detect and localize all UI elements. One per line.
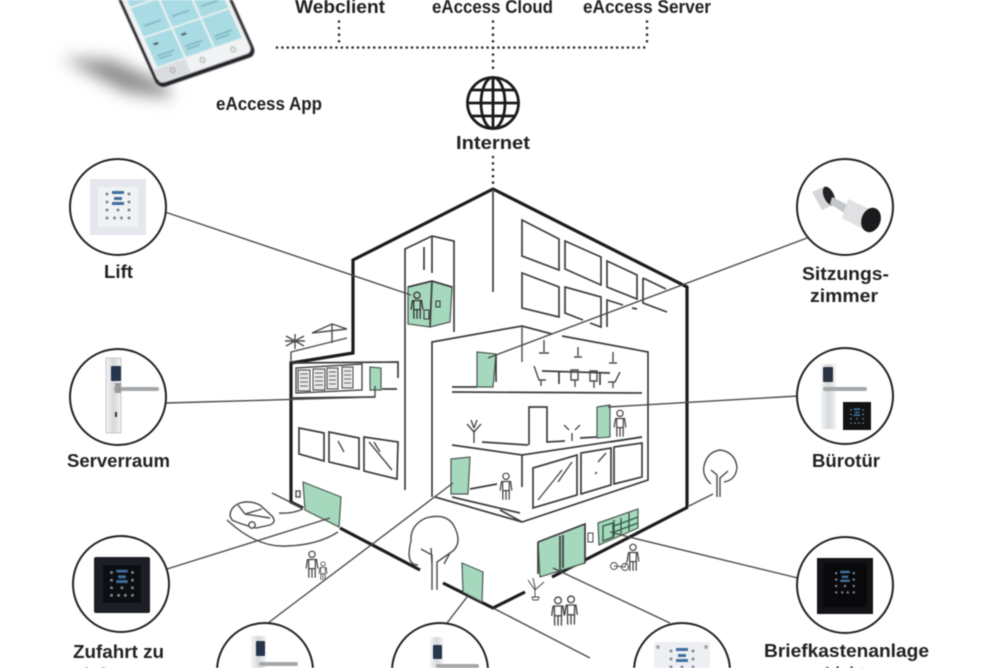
callout: bottom door handle left	[217, 623, 313, 668]
middle entrance door	[451, 457, 512, 500]
label: Lift: Lift	[104, 262, 133, 282]
label: Briefkastenanlage: Briefkastenanlage	[764, 641, 929, 661]
upper facade windows	[493, 189, 667, 327]
building illustration	[227, 189, 737, 626]
callout: Bürotür	[797, 348, 893, 471]
door handle circle	[70, 349, 166, 445]
lift shaft	[405, 236, 454, 490]
label: Bürotür: Bürotür	[812, 451, 880, 471]
phone body	[107, 0, 257, 89]
callout: Zufahrt zu Tiefgarage	[73, 536, 169, 668]
label: Serverraum: Serverraum	[67, 451, 170, 471]
label: Sitzungszimmer: Sitzungs-	[802, 264, 889, 284]
label: Sitzungszimmer	[802, 264, 889, 306]
office door highlighted	[597, 405, 610, 438]
label: Briefkastenanlage	[764, 641, 929, 668]
phone shadow	[62, 58, 172, 98]
lift cabin highlighted	[408, 281, 452, 327]
label: Zufahrt zu Tiefgarage: Zufahrt zu	[73, 642, 164, 662]
lift reader circle	[70, 159, 166, 255]
dark reader circle	[73, 536, 169, 632]
driveway and car	[227, 491, 338, 546]
double entrance door	[538, 524, 585, 577]
cylinder lock circle	[797, 159, 893, 255]
bottom entrance door	[462, 563, 483, 602]
label: Sitzungszimmer: zimmer	[810, 286, 878, 306]
callout: Lift	[70, 159, 166, 282]
meeting room door	[477, 352, 496, 387]
door handle and reader circle	[797, 348, 893, 444]
intercom panel	[588, 533, 593, 542]
connector lines	[165, 212, 807, 658]
callout: Serverraum	[67, 349, 170, 471]
street trees	[409, 450, 737, 590]
lower office windows	[452, 443, 642, 522]
people and plant at ground level	[306, 544, 639, 626]
eAccess app phone	[62, 0, 257, 98]
office floor	[452, 405, 642, 487]
dotted network connectors	[277, 22, 647, 188]
callout: bottom keypad right	[634, 623, 730, 668]
callout: Sitzungszimmer	[797, 159, 893, 306]
callout: Briefkastenanlage	[764, 537, 929, 668]
ground floor windows	[299, 428, 398, 479]
icon: internet globe	[468, 78, 518, 128]
plant and people	[467, 420, 481, 443]
terrace with umbrella and palm	[285, 324, 347, 362]
building outline	[291, 189, 688, 608]
black reader circle	[797, 537, 893, 633]
letterbox system	[598, 509, 638, 545]
garage door	[303, 482, 341, 527]
label: eAccess App: eAccess App	[216, 94, 322, 114]
server room	[291, 362, 398, 398]
meeting room	[432, 326, 648, 522]
label: Internet: Internet	[456, 133, 530, 153]
callout: bottom door handle centre	[392, 623, 488, 668]
server room door	[370, 367, 381, 390]
